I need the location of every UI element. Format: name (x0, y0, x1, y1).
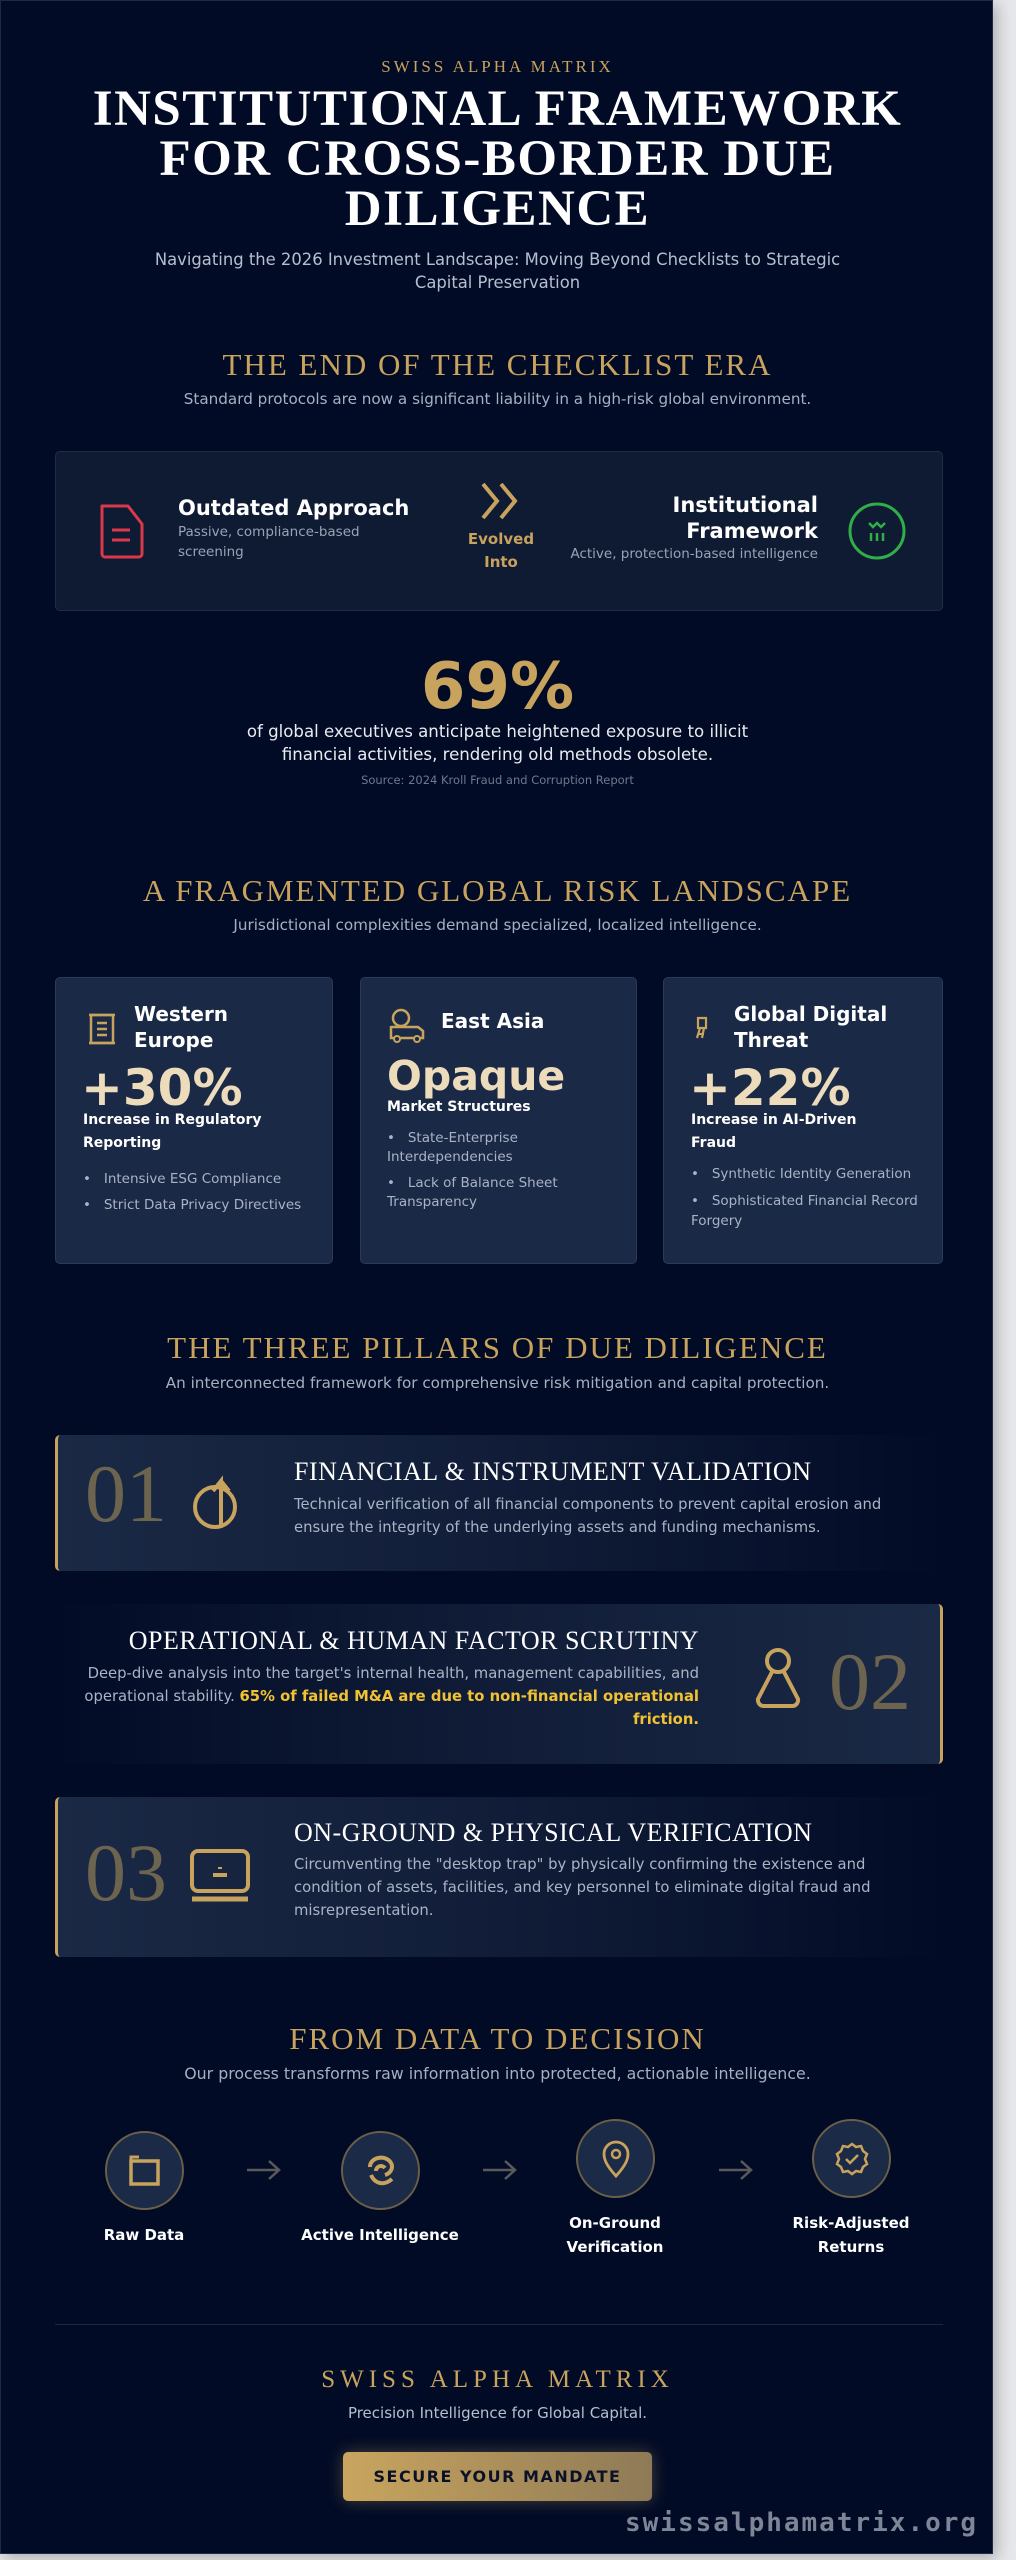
card title: Global Digital (734, 1002, 887, 1026)
bullets: • Synthetic Identity Generation • Sophisticated Financial Record (691, 1166, 918, 1209)
icon: green shield circle (848, 502, 906, 560)
arrow: evolved into: Into (484, 553, 518, 571)
subtitle (155, 250, 840, 292)
card: east asia (360, 977, 637, 1264)
panel: comparison (55, 451, 943, 611)
bullets: Interdependencies • Lack of Balance Sheet (387, 1149, 558, 1191)
icon: laptop (190, 1849, 250, 1902)
bullets (386, 1130, 558, 1210)
text: institutional framework (570, 493, 818, 562)
button: secure your mandate (343, 2452, 652, 2501)
heading: fragmented risk landscape: A FRAGMENTED GLOBAL RISK LANDSCAPE (143, 873, 852, 908)
stat label: Fraud (691, 1135, 736, 1151)
heading: data to decision: FROM DATA TO DECISION (289, 2021, 706, 2056)
step: risk-adjusted returns: Returns (818, 2238, 884, 2256)
heading: end of checklist era: THE END OF THE CHECKLIST ERA (222, 347, 772, 382)
icon: outdated document (100, 504, 144, 558)
source: Source: 2024 Kroll Fraud and Corruption Report (361, 773, 634, 787)
card title (734, 1002, 887, 1052)
step: risk-adjusted returns (792, 2119, 910, 2256)
section subtitle: Standard protocols are now a significant liability in a high-risk global environment. (184, 390, 811, 408)
icon: coin cycle (193, 1475, 237, 1529)
card title: Threat (734, 1028, 808, 1052)
stat label: Reporting (83, 1135, 161, 1151)
title: INSTITUTIONAL FRAMEWORK (93, 81, 902, 137)
stat: +22% (689, 1059, 851, 1117)
card title (134, 1002, 228, 1052)
icon: building (89, 1014, 115, 1044)
title: DILIGENCE (345, 181, 650, 237)
watermark: swissalphamatrix.org (625, 2508, 978, 2538)
icon: digital (696, 1016, 708, 1038)
icon: person with car (390, 1008, 424, 1043)
card title: East Asia (441, 1009, 544, 1033)
arrow: evolved into (468, 482, 534, 571)
text: outdated approach: Passive, compliance-based (178, 524, 360, 540)
step: active intelligence: Active Intelligence (301, 2226, 459, 2244)
pillar 01 (55, 1435, 943, 1571)
pillar 03 (55, 1797, 943, 1957)
text: outdated approach: Outdated Approach (178, 496, 409, 520)
stat description (247, 722, 748, 764)
number 03: 03 (85, 1827, 167, 1918)
step: on-ground verification: Verification (567, 2238, 663, 2256)
card: global digital threat (663, 977, 943, 1264)
stat label: Increase in Regulatory (83, 1112, 262, 1128)
title: FINANCIAL & INSTRUMENT VALIDATION (294, 1457, 811, 1486)
text: outdated approach (178, 496, 409, 560)
stat: +30% (81, 1059, 243, 1117)
bullets: Forgery (691, 1213, 742, 1229)
subtitle: Capital Preservation (415, 273, 580, 292)
process flow (104, 2119, 910, 2256)
footer tagline: Precision Intelligence for Global Capital. (348, 2404, 647, 2422)
number 01: 01 (85, 1448, 167, 1539)
card title: Western (134, 1002, 228, 1026)
stat: 69% (247, 650, 748, 787)
button: secure your mandate: SECURE YOUR MANDATE (374, 2467, 621, 2486)
text: institutional framework: Active, protection-based intelligence (570, 546, 818, 562)
stat: Opaque (387, 1052, 565, 1100)
text: institutional framework: Institutional (673, 493, 818, 517)
stat label (691, 1112, 856, 1151)
bullets (83, 1171, 301, 1213)
bullets: Transparency (387, 1194, 477, 1210)
arrow: evolved into: Evolved (468, 530, 534, 548)
description: Technical verification of all financial components to prevent capital erosion and ensure the integrity of the underlying assets and funding mechanisms. (294, 1496, 881, 1536)
card title: Europe (134, 1028, 213, 1052)
stat description: financial activities, rendering old methods obsolete. (282, 745, 713, 764)
bullets: • Intensive ESG Compliance (83, 1171, 281, 1187)
stat label: Increase in AI-Driven (691, 1112, 856, 1128)
section subtitle: An interconnected framework for comprehensive risk mitigation and capital protection. (166, 1374, 829, 1392)
description: Deep-dive analysis into the target's internal health, management capabilities, and operational stability. 65% of failed M&A are due to non-financial operational friction. (84, 1665, 699, 1728)
arrow (483, 2160, 517, 2180)
number 02: 02 (829, 1636, 911, 1727)
subtitle: Navigating the 2026 Investment Landscape: Moving Beyond Checklists to Strategic (155, 250, 840, 269)
card: western europe (55, 977, 333, 1264)
step: active intelligence (301, 2131, 459, 2244)
description: Circumventing the "desktop trap" by physically confirming the existence and condition of assets, facilities, and key personnel to eliminate digital fraud and misrepresentation. (294, 1856, 870, 1919)
stat description: of global executives anticipate heightened exposure to illicit (247, 722, 748, 741)
step: on-ground verification (566, 2119, 663, 2256)
title: OPERATIONAL & HUMAN FACTOR SCRUTINY (129, 1626, 699, 1655)
stat label: Market Structures (387, 1099, 531, 1115)
brand label: SWISS ALPHA MATRIX (381, 57, 614, 76)
step: raw data: Raw Data (104, 2226, 184, 2244)
step: on-ground verification: On-Ground (569, 2214, 661, 2232)
section subtitle: Jurisdictional complexities demand specialized, localized intelligence. (233, 916, 762, 934)
text: outdated approach: screening (178, 544, 244, 560)
icon: person (756, 1648, 800, 1708)
bullets: • State-Enterprise (387, 1130, 518, 1146)
stat: 69%: 69% (421, 650, 574, 724)
title: FOR CROSS-BORDER DUE (159, 131, 836, 187)
arrow (719, 2160, 753, 2180)
title: ON-GROUND & PHYSICAL VERIFICATION (294, 1818, 812, 1847)
heading: three pillars: THE THREE PILLARS OF DUE DILIGENCE (167, 1330, 828, 1365)
pillar 02 (55, 1604, 943, 1764)
arrow (247, 2160, 281, 2180)
step: risk-adjusted returns: Risk-Adjusted (792, 2214, 910, 2232)
footer brand: SWISS ALPHA MATRIX (321, 2366, 674, 2393)
title (93, 81, 902, 237)
step: raw data (104, 2131, 184, 2244)
bullets (691, 1166, 918, 1229)
bullets: • Strict Data Privacy Directives (83, 1197, 301, 1213)
section subtitle: Our process transforms raw information into protected, actionable intelligence. (184, 2064, 811, 2083)
text: institutional framework: Framework (686, 519, 818, 543)
stat label (83, 1112, 262, 1151)
